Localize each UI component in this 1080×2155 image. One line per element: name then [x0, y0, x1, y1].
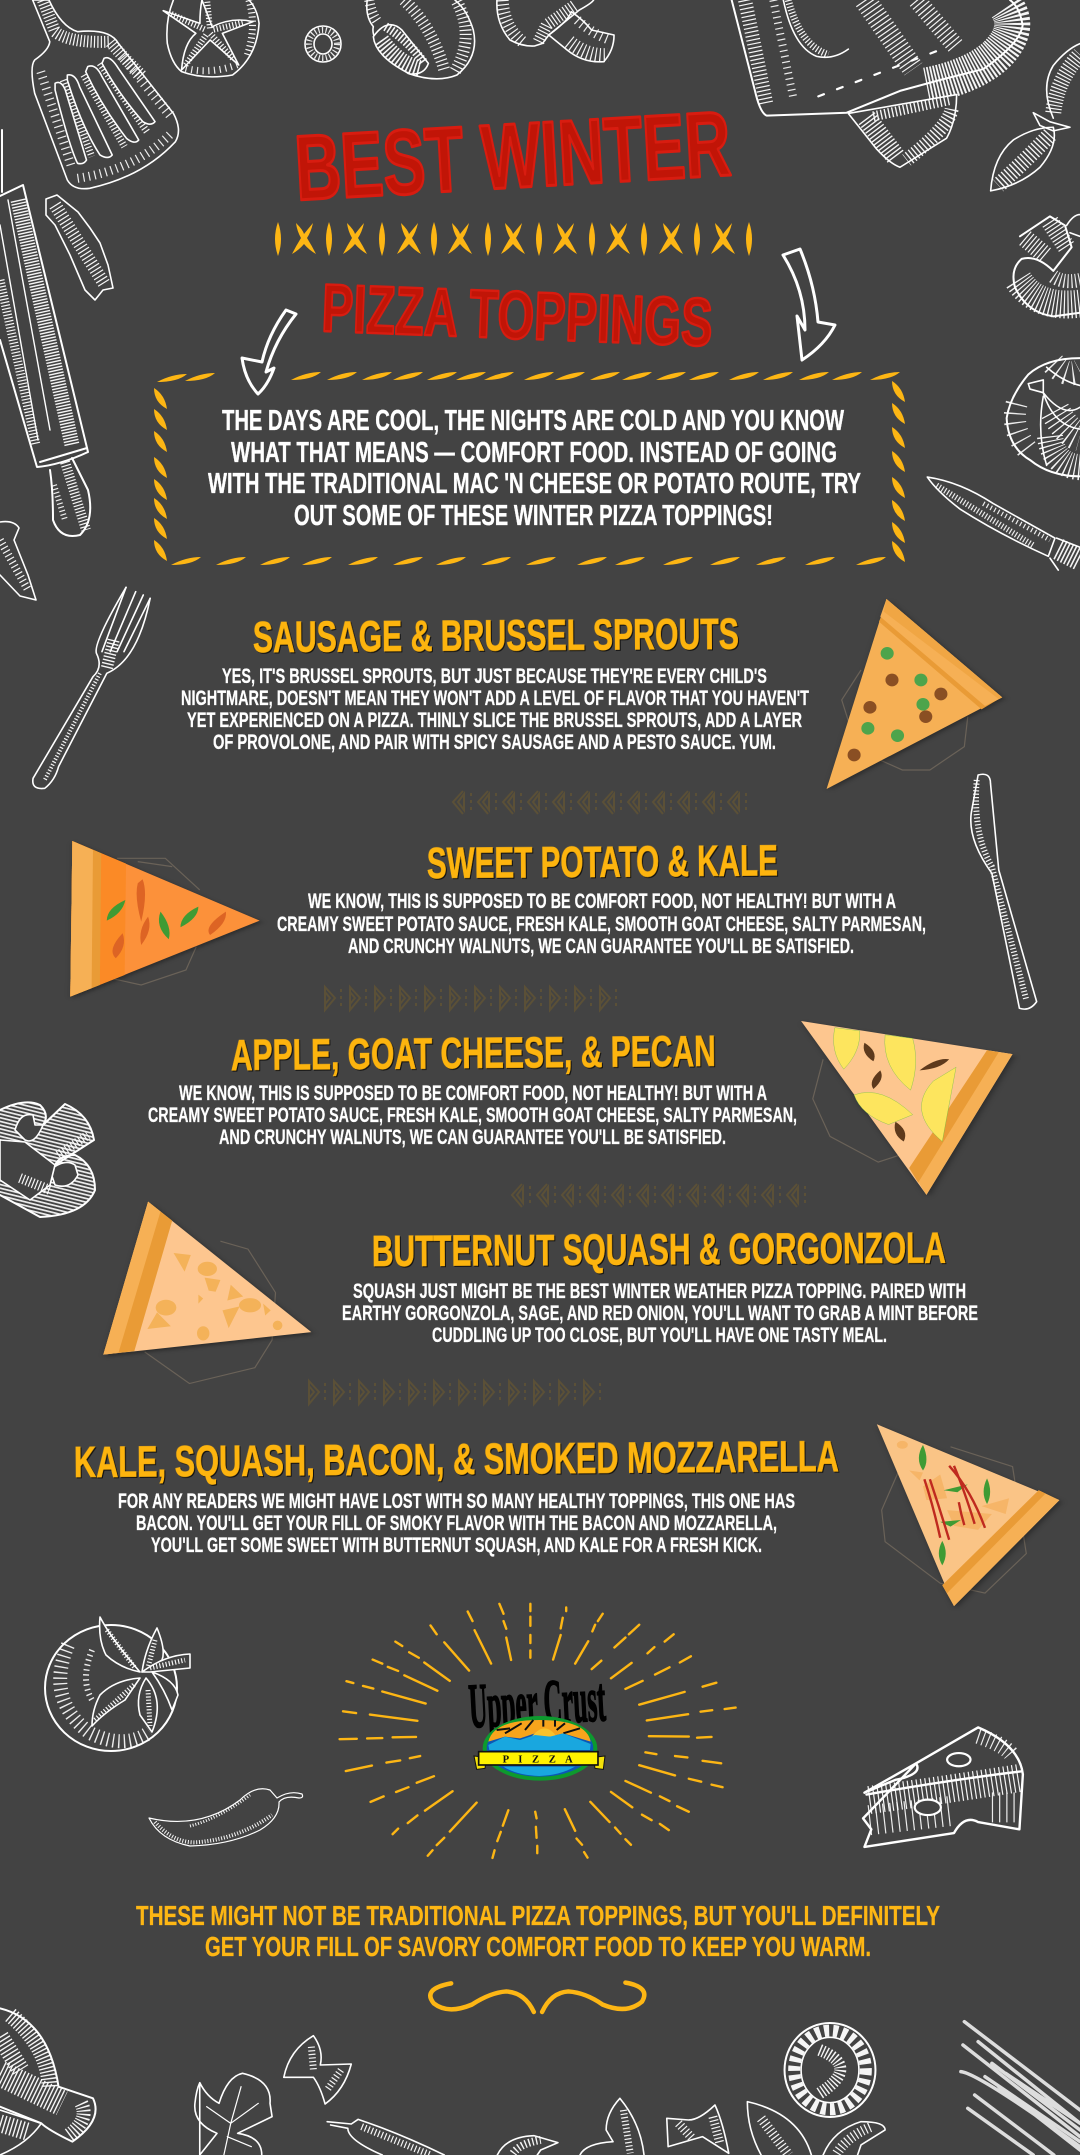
sketch: mushroom left [0, 1102, 95, 1217]
infographic canvas: Upper Crust [467, 1664, 607, 1741]
sketch: tomato slice [785, 2023, 875, 2117]
sweet potato slice [70, 841, 260, 997]
butternut and gorgonzola slice [103, 1202, 311, 1355]
section: apple goat cheese pecan [148, 1027, 797, 1149]
section: sausage and brussel sprouts [181, 610, 809, 754]
sketch: mushroom right [1013, 215, 1080, 316]
intro box [154, 372, 905, 565]
sketch: cheese wedge [863, 1727, 1023, 1847]
sketch: basil leaves [991, 44, 1080, 191]
sketch: mushroom top [367, 0, 475, 79]
section: sweet potato and kale [277, 836, 926, 958]
sketch: twisted pasta [46, 195, 113, 300]
heading: SAUSAGE & BRUSSEL SPROUTS [253, 610, 739, 662]
body text [342, 1280, 978, 1347]
sketch: chili pepper [149, 1789, 303, 1846]
sausage and sprout slice [827, 599, 1002, 789]
body text: BACON. YOU'LL GET YOUR FILL OF SMOKY FLAVOR WITH THE BACON AND MOZZARELLA, [136, 1512, 777, 1535]
divider: right triangles 1 [325, 987, 616, 1010]
pizza slice 5 [877, 1424, 1059, 1606]
heading: APPLE, GOAT CHEESE, & PECAN [231, 1027, 716, 1080]
body text: FOR ANY READERS WE MIGHT HAVE LOST WITH SO MANY HEALTHY TOPPINGS, THIS ONE HAS [118, 1490, 795, 1513]
section: butternut squash and gorgonzola [342, 1223, 978, 1347]
body text [181, 665, 809, 754]
sketch: tomato with stem [163, 0, 259, 77]
sketch: rolling pin [0, 130, 90, 536]
sketch: bell pepper right [1007, 358, 1080, 476]
sketch: leaf pair [747, 2102, 885, 2155]
sketch: small leaf left [0, 522, 36, 600]
sketch: mushroom bottom [0, 2008, 96, 2155]
pizza slice 1 [827, 599, 1002, 789]
polygon accent [882, 1447, 1026, 1593]
pizza slice 4 [103, 1202, 311, 1384]
body text: NIGHTMARE, DOESN'T MEAN THEY WON'T ADD A LEVEL OF FLAVOR THAT YOU HAVEN'T [181, 687, 809, 710]
polygon accent [103, 858, 200, 985]
sketch: tomato lower left [45, 1617, 190, 1751]
sketch: small leaf [497, 2136, 558, 2155]
closing message [136, 1900, 940, 1962]
sketch: chef knife [927, 477, 1080, 570]
logo badge [474, 1716, 605, 1781]
body text: WE KNOW, THIS IS SUPPOSED TO BE COMFORT FOOD, NOT HEALTHY! BUT WITH A [179, 1082, 767, 1105]
arrow: right [783, 249, 835, 360]
arrow: left [242, 310, 296, 394]
body text: YET EXPERIENCED ON A PIZZA. THINLY SLICE THE BRUSSEL SPROUTS, ADD A LAYER [187, 709, 802, 732]
burst rays [340, 1604, 736, 1858]
body text: AND CRUNCHY WALNUTS, WE CAN GUARANTEE YOU'LL BE SATISFIED. [348, 935, 854, 958]
intro text: WHAT THAT MEANS — COMFORT FOOD. INSTEAD OF GOING [231, 437, 837, 469]
kale bacon mozzarella slice [877, 1424, 1059, 1606]
sketch: pepper [327, 2119, 444, 2155]
body text: OF PROVOLONE, AND PAIR WITH SPICY SAUSAGE AND A PESTO SAUCE. YUM. [213, 731, 776, 754]
sketch: table knife [971, 774, 1037, 1009]
body text: AND CRUNCHY WALNUTS, WE CAN GUARANTEE YOU'LL BE SATISFIED. [219, 1126, 726, 1149]
divider: left triangles 2 [512, 1184, 805, 1207]
sketch: mushroom slice top [497, 0, 614, 62]
title ornament row [275, 222, 752, 256]
body text [148, 1082, 797, 1149]
sketch: parsley [195, 2073, 272, 2155]
polygon accent [145, 1241, 276, 1384]
dashed border [154, 372, 905, 565]
apple and pecan slice [801, 1021, 1013, 1195]
intro text [208, 405, 861, 532]
sketch: chef hat [732, 0, 1023, 167]
polygon accent [813, 1059, 902, 1162]
sketch: bowtie pasta second [667, 2105, 729, 2153]
sketch: bowtie pasta [284, 2036, 351, 2104]
sketch: spaghetti [961, 2022, 1080, 2155]
sketch: spatula [32, 0, 178, 189]
title: pizza toppings: PIZZA TOPPINGS [320, 270, 714, 361]
body text [118, 1490, 795, 1557]
body text: CREAMY SWEET POTATO SAUCE, FRESH KALE, SMOOTH GOAT CHEESE, SALTY PARMESAN, [148, 1104, 797, 1127]
body text: YOU'LL GET SOME SWEET WITH BUTTERNUT SQUASH, AND KALE FOR A FRESH KICK. [151, 1534, 762, 1557]
section: kale squash bacon smoked mozzarella [74, 1432, 839, 1557]
flourish [430, 1983, 644, 2012]
body text [277, 890, 926, 958]
bottom sketches [0, 2008, 1080, 2155]
divider: left triangles 1 [453, 791, 746, 814]
title: best winter: BEST WINTER [292, 93, 733, 220]
sketch: olive ring [305, 26, 341, 62]
sketch: fork [33, 587, 150, 789]
intro text: OUT SOME OF THESE WINTER PIZZA TOPPINGS! [294, 500, 773, 532]
body text: YES, IT'S BRUSSEL SPROUTS, BUT JUST BECAUSE THEY'RE EVERY CHILD'S [222, 665, 767, 688]
logo: upper crust pizza [467, 1664, 607, 1781]
sketch: leaf [580, 2098, 644, 2155]
pizza slice 2 [70, 841, 260, 997]
divider: right triangles 2 [309, 1381, 600, 1404]
pizza slice 3 [801, 1021, 1013, 1195]
polygon accent [842, 670, 968, 770]
banner word: P I Z Z A [503, 1755, 573, 1766]
heading: SWEET POTATO & KALE [427, 836, 778, 888]
